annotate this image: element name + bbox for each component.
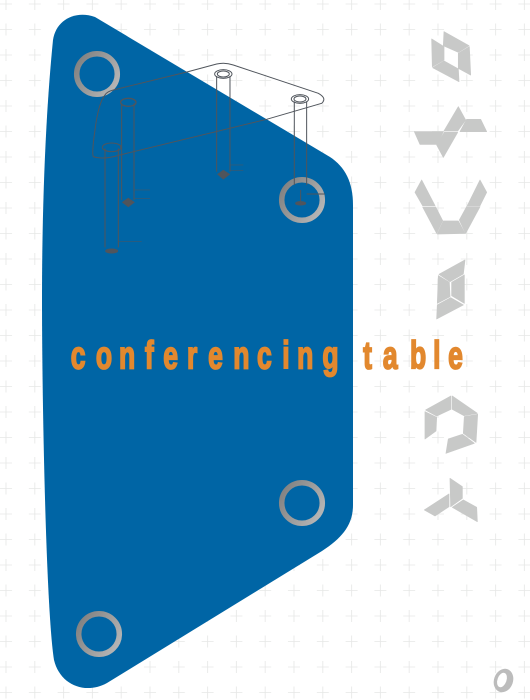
icon: v shape [415, 180, 487, 234]
ring: top left [77, 54, 117, 94]
wireframe: leg back left [121, 98, 150, 207]
ring: bottom left [79, 614, 119, 654]
wireframe: leg back right [291, 95, 325, 205]
ring: bottom right [282, 483, 322, 523]
ring: top right [282, 180, 322, 220]
wireframe: table top outline [93, 63, 324, 158]
title [71, 335, 463, 378]
wireframe: leg back centre [215, 70, 243, 179]
wireframe: leg front left [102, 143, 142, 253]
icon: hollow rhombus [432, 32, 471, 82]
wireframe: table drawing [93, 63, 325, 253]
icon: open hexagon [425, 396, 478, 453]
title word: table: table [363, 335, 463, 378]
icon: three-blade star [424, 478, 477, 522]
icon: corner logo ring [490, 666, 517, 695]
title word: conferencing: conferencing [71, 335, 339, 378]
icon: slanted block [437, 260, 465, 319]
icons: grey letter shapes column [414, 32, 487, 522]
leg mounting rings [77, 54, 322, 654]
icon: x shape [414, 107, 487, 157]
panel: blue table top shape [42, 15, 353, 688]
